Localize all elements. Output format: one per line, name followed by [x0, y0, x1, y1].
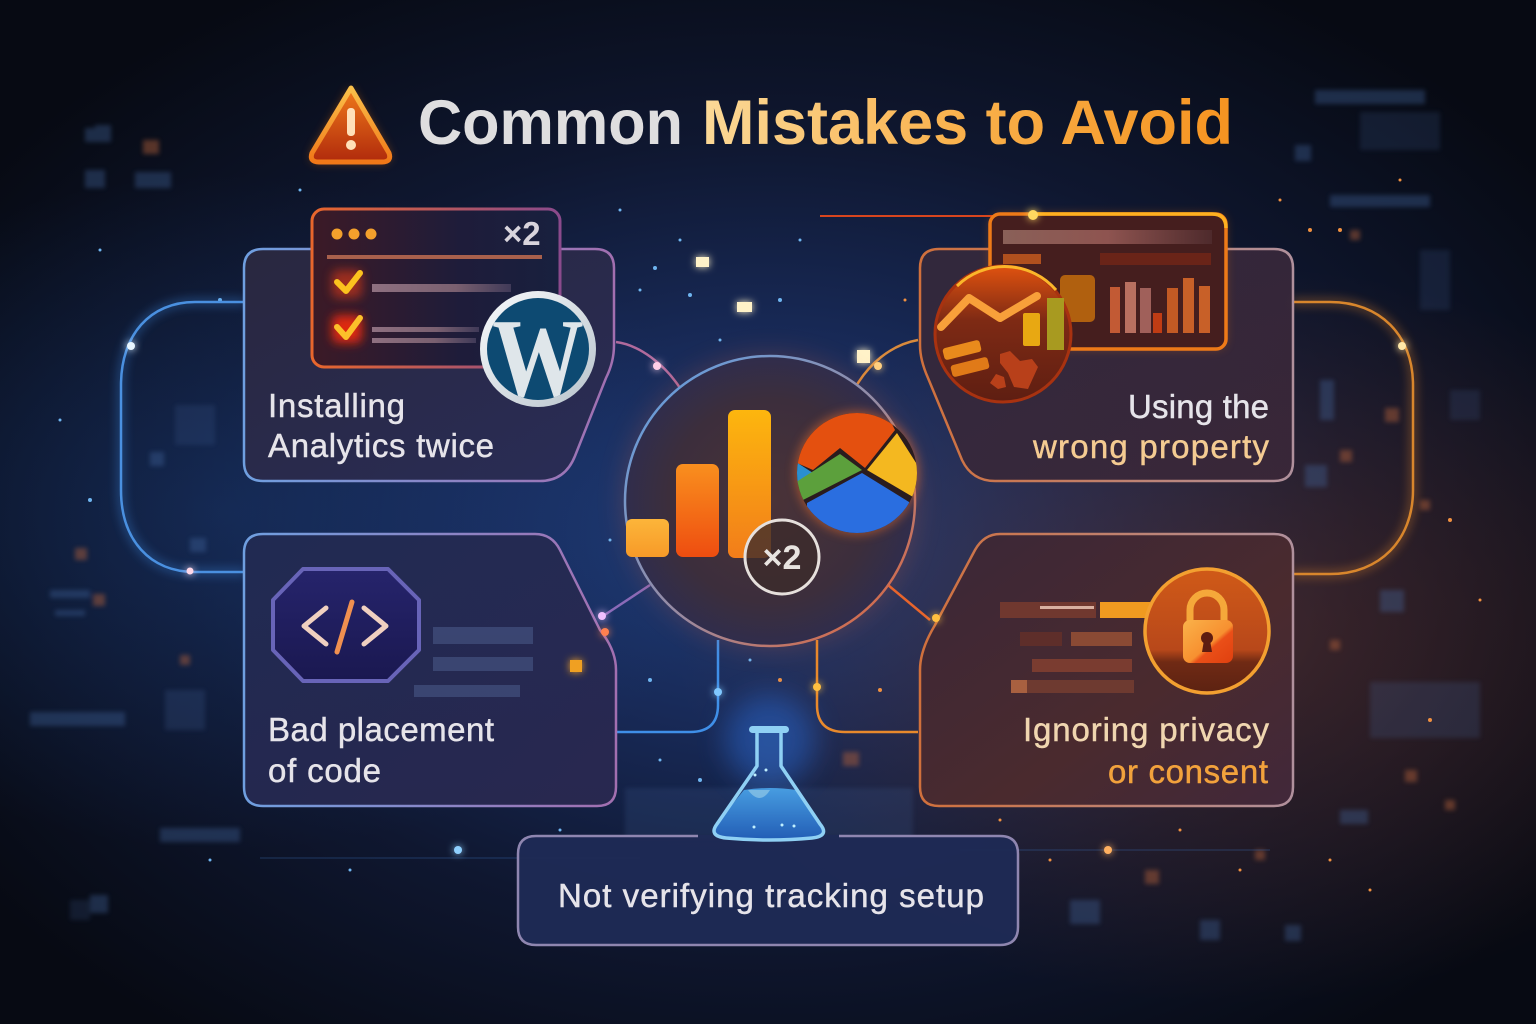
label — [1023, 711, 1270, 790]
panel: bad placement of code — [244, 534, 616, 806]
label: Installing — [268, 387, 405, 424]
label: Analytics twice — [268, 427, 494, 464]
hub: analytics circle — [625, 356, 925, 646]
title — [311, 88, 1233, 162]
decorative code lines — [1000, 602, 1150, 693]
title text: common: Common — [418, 88, 683, 158]
icon: browser window x2: ×2 — [503, 215, 541, 252]
label: Using the — [1128, 388, 1269, 425]
label — [1032, 388, 1270, 465]
icon: chart badge — [935, 266, 1071, 402]
icon: flask — [714, 726, 824, 840]
icon: padlock — [1145, 569, 1269, 693]
connector: hub links — [600, 340, 930, 732]
label: of code — [268, 752, 381, 789]
icon: browser window x2 — [312, 209, 560, 367]
icon: pie chart — [790, 400, 925, 540]
label: wrong property — [1032, 428, 1270, 465]
connector: left blue loop — [121, 302, 243, 574]
icon: report window — [820, 210, 1226, 349]
label — [268, 711, 494, 789]
connector: right orange loop — [1294, 302, 1413, 574]
panel: ignoring privacy or consent — [920, 534, 1293, 806]
label: Ignoring privacy — [1023, 711, 1270, 748]
label: Not verifying tracking setup — [558, 877, 984, 914]
panel: installing analytics twice — [244, 209, 614, 481]
label: Bad placement — [268, 711, 494, 748]
title text: mistakes to avoid: Mistakes to Avoid — [702, 88, 1233, 158]
icon: warning triangle — [311, 88, 390, 162]
panel: using the wrong property — [820, 210, 1293, 481]
label: or consent — [1108, 753, 1268, 790]
badge: x2: ×2 — [763, 539, 801, 577]
label — [268, 387, 494, 464]
decorative code lines — [414, 627, 533, 697]
panel: not verifying tracking setup — [518, 835, 1018, 945]
bar chart icon — [626, 410, 771, 558]
icon: code hexagon — [273, 569, 419, 681]
icon: wordpress logo: W — [492, 297, 584, 421]
badge: x2 — [745, 520, 819, 594]
